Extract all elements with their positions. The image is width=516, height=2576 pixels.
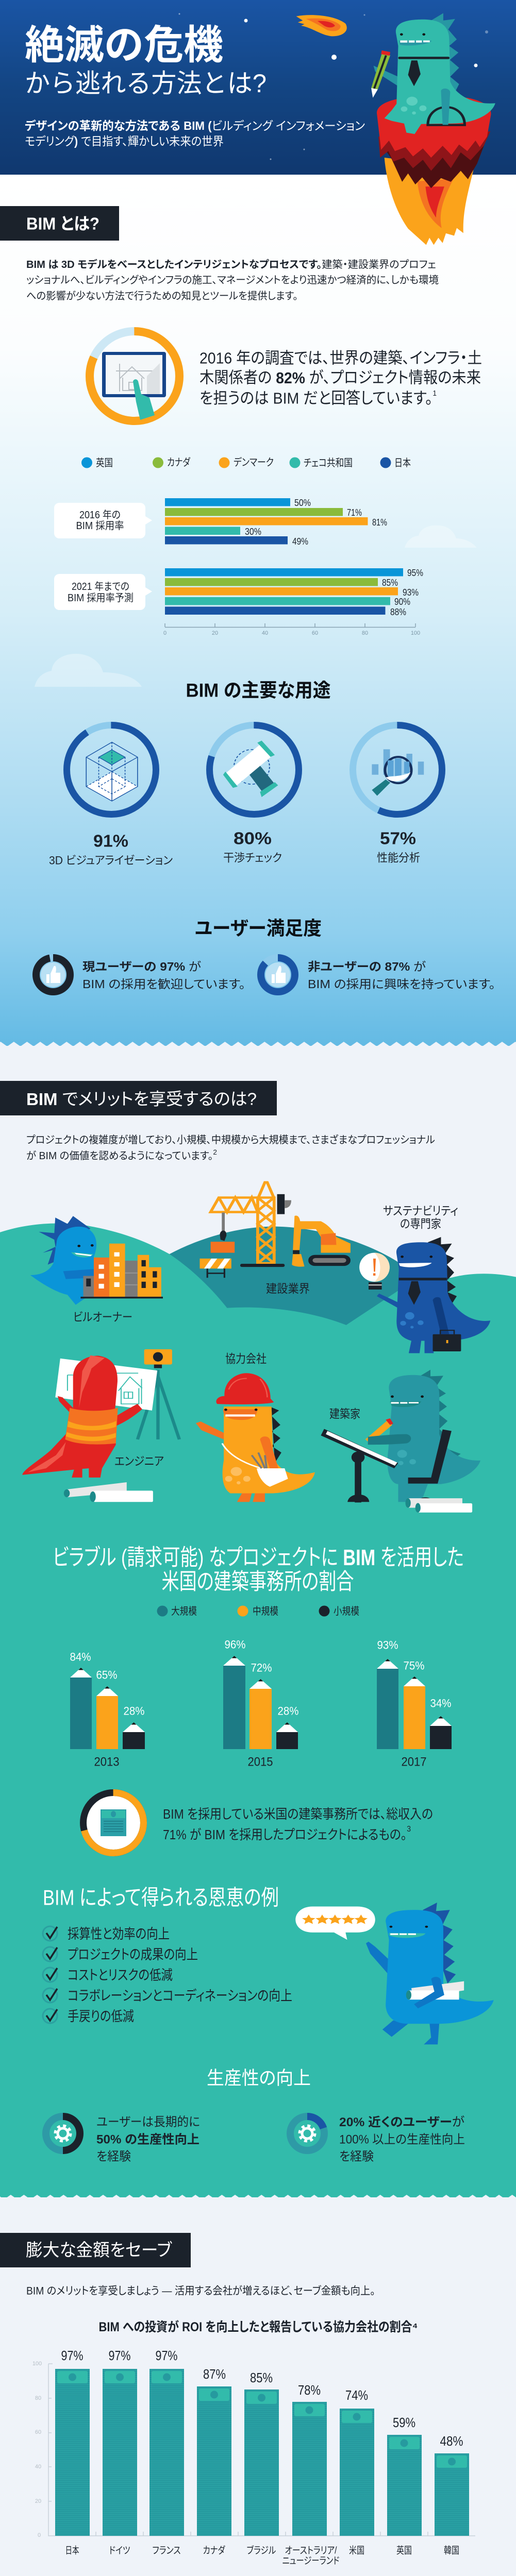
text: 20% productivity: を経験 <box>339 2149 374 2164</box>
illustration: hero dinosaur on rocket rock <box>371 13 495 245</box>
label: サステナビリティ <box>383 1204 458 1217</box>
callout: 2016 adoption <box>54 503 152 538</box>
pencil bar chart: 2015: 96% <box>225 1638 245 1651</box>
bar chart: 2016 adoption: 50% <box>294 498 311 508</box>
icon: tablet ring 82% <box>90 331 179 421</box>
chart axis: 60 <box>312 630 318 636</box>
callout: 2016 adoption: BIM 採用率 <box>76 520 124 532</box>
pencil bar chart: 2017 <box>377 1638 452 1769</box>
rolled plans <box>406 1981 464 1999</box>
excavator <box>292 1216 351 1267</box>
tripod camera <box>138 1349 179 1439</box>
stat: 80% <box>223 828 282 865</box>
bar: Japan 97% <box>55 2348 90 2556</box>
text: current users <box>82 960 245 991</box>
callout: 2021 forecast <box>54 574 152 610</box>
section heading: who benefits <box>0 1081 277 1115</box>
bar: Australia/NZ 78% <box>282 2382 339 2567</box>
pencil bar chart: 2015: 28% <box>277 1704 299 1718</box>
panel: hero background <box>0 0 516 175</box>
chart legend: countries: チェコ共和国 <box>304 457 353 469</box>
bar: UK 59%: 英国 <box>396 2545 412 2556</box>
panel: teal benefits background <box>0 1223 516 2197</box>
icon: magnifier over bars <box>372 749 424 796</box>
icon: comet <box>296 15 347 36</box>
chart axes: 0 <box>38 2532 41 2538</box>
icon: document with banknote <box>101 1809 126 1836</box>
label: 建設業界 <box>266 1282 310 1295</box>
bar: Brazil 85%: ブラジル <box>246 2544 276 2556</box>
chart axes: 40 <box>35 2464 41 2470</box>
title: 絶滅の危機 <box>25 22 223 67</box>
light bulb <box>359 1253 390 1290</box>
sweater <box>65 1408 118 1445</box>
dino spikes <box>431 13 459 100</box>
stat: 80%: 80% <box>234 828 272 848</box>
label <box>383 1204 458 1230</box>
label: エンジニア <box>114 1454 164 1468</box>
text block: BIM explanation: ッショナルへ、ビルディングやインフラの施工、マネージメントをより迅速かつ経済的に、しかも環境 <box>26 274 439 286</box>
text block: 82% statement: 1 <box>432 388 437 398</box>
bar chart: 2016 adoption <box>165 498 387 547</box>
rolled plans <box>406 1498 472 1513</box>
donut: current users 97% <box>36 958 70 992</box>
hero subtitle <box>25 119 365 148</box>
donut: non-users 87% <box>261 958 295 992</box>
heading: BIM の主要な用途: BIM の主要な用途 <box>186 680 331 701</box>
bar: Germany 97% <box>103 2348 137 2556</box>
bar: France 97% <box>149 2348 184 2556</box>
chart axes: 100 <box>32 2361 42 2367</box>
bar chart: 2016 adoption: 30% <box>245 527 261 537</box>
pencil bar chart: 2017: 93% <box>377 1638 398 1652</box>
pencil bar chart: 2017: 75% <box>403 1659 425 1672</box>
helmet <box>216 1373 274 1404</box>
text block: who benefits <box>26 1133 435 1162</box>
pencil bar chart: 2013: 28% <box>124 1704 144 1718</box>
text block: BIM explanation: への影響が少ない方法で行うための知見とツールを提供します。 <box>26 290 298 302</box>
dino arm <box>441 89 450 125</box>
character: building owner dino <box>30 1216 163 1305</box>
pencil bar chart: 2017: 2017 <box>401 1755 427 1769</box>
bar: Canada 87%: 87% <box>203 2366 226 2382</box>
heading: benefit examples: BIM によって得られる恩恵の例 <box>43 1886 279 1909</box>
bar: UK 59% <box>387 2415 422 2556</box>
chart title: ROI: BIM への投資が ROI を向上したと報告している協力会社の割合⁴ <box>99 2319 418 2334</box>
callout: 2021 forecast: BIM 採用率予測 <box>68 592 134 604</box>
text: 71% revenue: BIM を採用している米国の建築事務所では、総収入の <box>163 1806 433 1822</box>
chart legend: firm size: 小規模 <box>334 1605 359 1617</box>
dino mouth <box>399 41 432 45</box>
checklist: コラボレーションとコーディネーションの向上 <box>68 1988 292 2004</box>
chart axis <box>163 623 420 636</box>
stat: 57%: 性能分析 <box>377 851 420 865</box>
panel: benefits section background <box>0 1046 516 1365</box>
briefcase <box>432 1330 461 1351</box>
pencil bar chart: 2013: 84% <box>70 1651 91 1663</box>
blueprint <box>55 1359 157 1411</box>
title: から逃れる方法とは? <box>25 69 267 98</box>
bar: Korea 48% <box>435 2433 469 2556</box>
text: 50% productivity: ユーザーは長期的に <box>96 2115 200 2129</box>
bar chart: 2021 forecast: 95% <box>407 568 423 578</box>
bar chart: 2016 adoption: 49% <box>292 536 308 547</box>
chart axes <box>32 2361 475 2538</box>
bar chart: 2021 forecast: 90% <box>394 597 410 607</box>
icon: thumbs up <box>46 966 60 983</box>
text block: who benefits: 2 <box>213 1148 217 1156</box>
chart title: billable projects: 米国の建築事務所の割合 <box>162 1569 354 1594</box>
stat: 91%: 3D ビジュアライゼーション <box>49 854 173 867</box>
pencil bar chart: 2015: 72% <box>251 1661 272 1674</box>
rock underside <box>384 142 486 188</box>
chair <box>408 1429 452 1502</box>
chart axis: 40 <box>262 630 268 636</box>
callout: 2016 adoption: 2016 年の <box>79 509 121 521</box>
text: 71% revenue: 3 <box>407 1825 411 1833</box>
checklist: コストとリスクの低減 <box>68 1968 173 1983</box>
bar chart: 2021 forecast <box>165 568 423 617</box>
title <box>25 22 267 98</box>
chart legend: countries <box>81 456 411 469</box>
donut: clash check 80% <box>209 725 299 814</box>
chart legend: firm size: 中規模 <box>253 1605 278 1617</box>
checklist: 採算性と効率の向上 <box>68 1926 170 1942</box>
icon: thumbs up <box>272 966 286 983</box>
text: 71% revenue: 71% が BIM を採用したプロジェクトによるもの。 <box>163 1827 441 1842</box>
character: architect dino <box>321 1370 480 1502</box>
stat: 91% <box>49 832 173 867</box>
pencil bar chart: 2013: 65% <box>96 1668 118 1682</box>
icon: gear <box>55 2126 71 2141</box>
bar: Canada 87%: カナダ <box>203 2545 226 2556</box>
checklist: プロジェクトの成果の向上 <box>68 1947 198 1962</box>
text: 20% productivity <box>339 2115 465 2164</box>
donut: 71% revenue <box>84 1793 143 1853</box>
bar: UK 59%: 59% <box>393 2415 415 2430</box>
clouds <box>35 526 477 687</box>
illustration: crane and construction equipment <box>200 1182 351 1278</box>
callout: 2021 forecast: 2021 年までの <box>72 581 129 592</box>
chart axis: 100 <box>411 630 420 636</box>
rocket flames <box>385 158 474 245</box>
chart legend: countries: 日本 <box>394 457 411 469</box>
rolled plans <box>64 1482 153 1502</box>
icon: cube <box>86 742 138 801</box>
pencil and arm <box>365 1418 411 1445</box>
icon: pipe <box>223 741 278 797</box>
protractor <box>428 107 464 125</box>
text: 71% revenue <box>163 1806 433 1842</box>
bar: France 97%: 97% <box>156 2348 177 2363</box>
pencil bar chart: 2013 <box>70 1651 145 1769</box>
bar: Australia/NZ 78%: 78% <box>298 2382 321 2398</box>
chart title: billable projects <box>53 1545 464 1594</box>
bar: Australia/NZ 78%: ニュージーランド <box>282 2555 339 2567</box>
bar: Korea 48%: 48% <box>440 2433 463 2449</box>
text block: BIM explanation: BIM は 3D モデルをベースとしたインテリジェントなプロセスです。建築・建設業界のプロフェ <box>26 258 436 270</box>
text: 50% productivity: 50% の生産性向上 <box>96 2133 199 2146</box>
heading: ユーザー満足度: ユーザー満足度 <box>195 918 322 939</box>
icon: gear <box>299 2126 315 2141</box>
character: sustainability expert dino <box>359 1237 490 1353</box>
bar chart: 2016 adoption: 71% <box>347 507 362 518</box>
panel: savings section background <box>0 2197 516 2576</box>
label: ビルオーナー <box>73 1310 132 1324</box>
chart legend: countries: カナダ <box>167 456 191 468</box>
hero subtitle: モデリング) で目指す、輝かしい未来の世界 <box>25 134 224 148</box>
stat: 80%: 干渉チェック <box>223 851 282 865</box>
text: current users: 現ユーザーの 97% が <box>82 960 201 973</box>
bar chart: ROI by country <box>55 2348 469 2567</box>
chart axis: 0 <box>163 630 167 636</box>
chart axes: 60 <box>35 2429 41 2435</box>
section heading: BIM とは? <box>0 206 119 241</box>
drafting table <box>321 1429 398 1502</box>
bar: Korea 48%: 韓国 <box>444 2545 459 2556</box>
bar: USA 74%: 米国 <box>349 2545 364 2556</box>
text: non-users: 非ユーザーの 87% が <box>308 960 426 973</box>
label: の専門家 <box>400 1217 441 1230</box>
barrier <box>200 1259 231 1278</box>
text block: who benefits: プロジェクトの複雑度が増しており、小規模、中規模から大規模まで、さまざまなプロフェッショナル <box>26 1133 435 1146</box>
section heading: BIM とは?: BIM とは? <box>26 214 99 233</box>
text block: 82% statement <box>199 349 482 407</box>
stat: 91%: 91% <box>93 832 128 850</box>
pencil bar chart: 2013: 2013 <box>94 1755 120 1769</box>
bar: France 97%: フランス <box>153 2545 180 2556</box>
bar: Japan 97%: 日本 <box>65 2545 79 2556</box>
label: 協力会社 <box>225 1352 267 1365</box>
chart legend: firm size: 大規模 <box>171 1605 197 1617</box>
text: non-users: BIM の採用に興味を持っています。 <box>308 977 495 991</box>
stat: 57%: 57% <box>380 828 416 848</box>
chart legend: countries: デンマーク <box>234 456 274 468</box>
hero stars <box>178 13 488 160</box>
bar: USA 74%: 74% <box>345 2387 368 2403</box>
donut: 50% productivity <box>46 2116 80 2150</box>
dino body <box>385 20 495 134</box>
character: engineer dino <box>22 1349 179 1478</box>
bar chart: 2021 forecast: 88% <box>390 607 406 617</box>
text block: 82% statement: 2016 年の調査では、世界の建築、インフラ・土 <box>199 349 482 367</box>
section heading: who benefits: BIM でメリットを享受するのは? <box>26 1089 257 1109</box>
text: savings intro: BIM のメリットを享受しましょう — 活用する会社が増えるほど、セーブ金額も向上。 <box>26 2285 375 2297</box>
text block: who benefits: が BIM の価値を認めるようになっています。 <box>26 1150 218 1162</box>
bar: Germany 97%: 97% <box>108 2348 131 2363</box>
checklist <box>43 1926 292 2024</box>
checklist: 手戻りの低減 <box>68 2009 134 2024</box>
donut: 3D visualization 91% <box>67 725 156 814</box>
collar and tie <box>398 57 450 86</box>
tool pouch <box>222 1444 288 1487</box>
text: 20% productivity: 100% 以上の生産性向上 <box>339 2133 465 2146</box>
speech bubble <box>295 1906 375 1940</box>
bar: Brazil 85%: 85% <box>250 2370 273 2385</box>
chart legend: firm size <box>157 1605 359 1617</box>
pencil bar chart: 2017: 34% <box>430 1697 452 1709</box>
chart title: billable projects: ビラブル (請求可能) なプロジェクトに BIM を活用した <box>53 1545 464 1570</box>
pencil bar chart: 2015: 2015 <box>247 1755 273 1769</box>
character: reviewer dino with speech bubble <box>295 1903 494 2044</box>
bar chart: 2021 forecast: 93% <box>403 587 419 598</box>
bar: Brazil 85% <box>244 2370 279 2556</box>
dino arm and pencil <box>371 50 398 98</box>
section heading: savings: 膨大な金額をセーブ <box>26 2241 172 2260</box>
label: 建築家 <box>329 1407 360 1420</box>
chart axis: 80 <box>362 630 368 636</box>
text: 50% productivity <box>96 2115 200 2164</box>
text block: 82% statement: 木関係者の 82% が、プロジェクト情報の未来 <box>199 369 481 386</box>
bar: Japan 97%: 97% <box>61 2348 84 2363</box>
bar: Germany 97%: ドイツ <box>109 2545 130 2556</box>
panel: sky gradient background <box>0 175 516 1046</box>
chart legend: countries: 英国 <box>96 457 113 469</box>
chart axes: 20 <box>35 2498 41 2504</box>
text: current users: BIM の採用を歓迎しています。 <box>82 977 245 991</box>
rock top <box>377 98 491 158</box>
heading: productivity: 生産性の向上 <box>207 2067 311 2089</box>
bar: Australia/NZ 78%: オーストラリア/ <box>285 2545 337 2556</box>
text: 50% productivity: を経験 <box>96 2149 131 2164</box>
bar: Canada 87% <box>197 2366 231 2556</box>
text: non-users <box>308 960 495 991</box>
buildings <box>80 1244 163 1298</box>
text: 20% productivity: 20% 近くのユーザーが <box>339 2115 464 2129</box>
bar chart: 2016 adoption: 81% <box>372 517 387 528</box>
section heading: savings <box>0 2233 191 2267</box>
text block: BIM explanation <box>26 258 439 302</box>
hero subtitle: デザインの革新的な方法である BIM (ビルディング インフォメーション <box>25 119 365 132</box>
stat: 57% <box>377 828 420 865</box>
character: contractor dino <box>196 1373 315 1502</box>
donut: 20% productivity <box>290 2116 324 2150</box>
text block: 82% statement: を担うのは BIM だと回答しています。 <box>199 389 453 407</box>
hill: construction <box>170 1227 400 1325</box>
chart axes: 80 <box>35 2395 41 2401</box>
crane <box>211 1182 274 1263</box>
bar chart: 2021 forecast: 85% <box>382 578 398 588</box>
chart axis: 20 <box>212 630 218 636</box>
pencil bar chart: 2015 <box>223 1638 299 1769</box>
donut: performance analysis 57% <box>353 725 442 814</box>
bar: USA 74% <box>340 2387 374 2556</box>
